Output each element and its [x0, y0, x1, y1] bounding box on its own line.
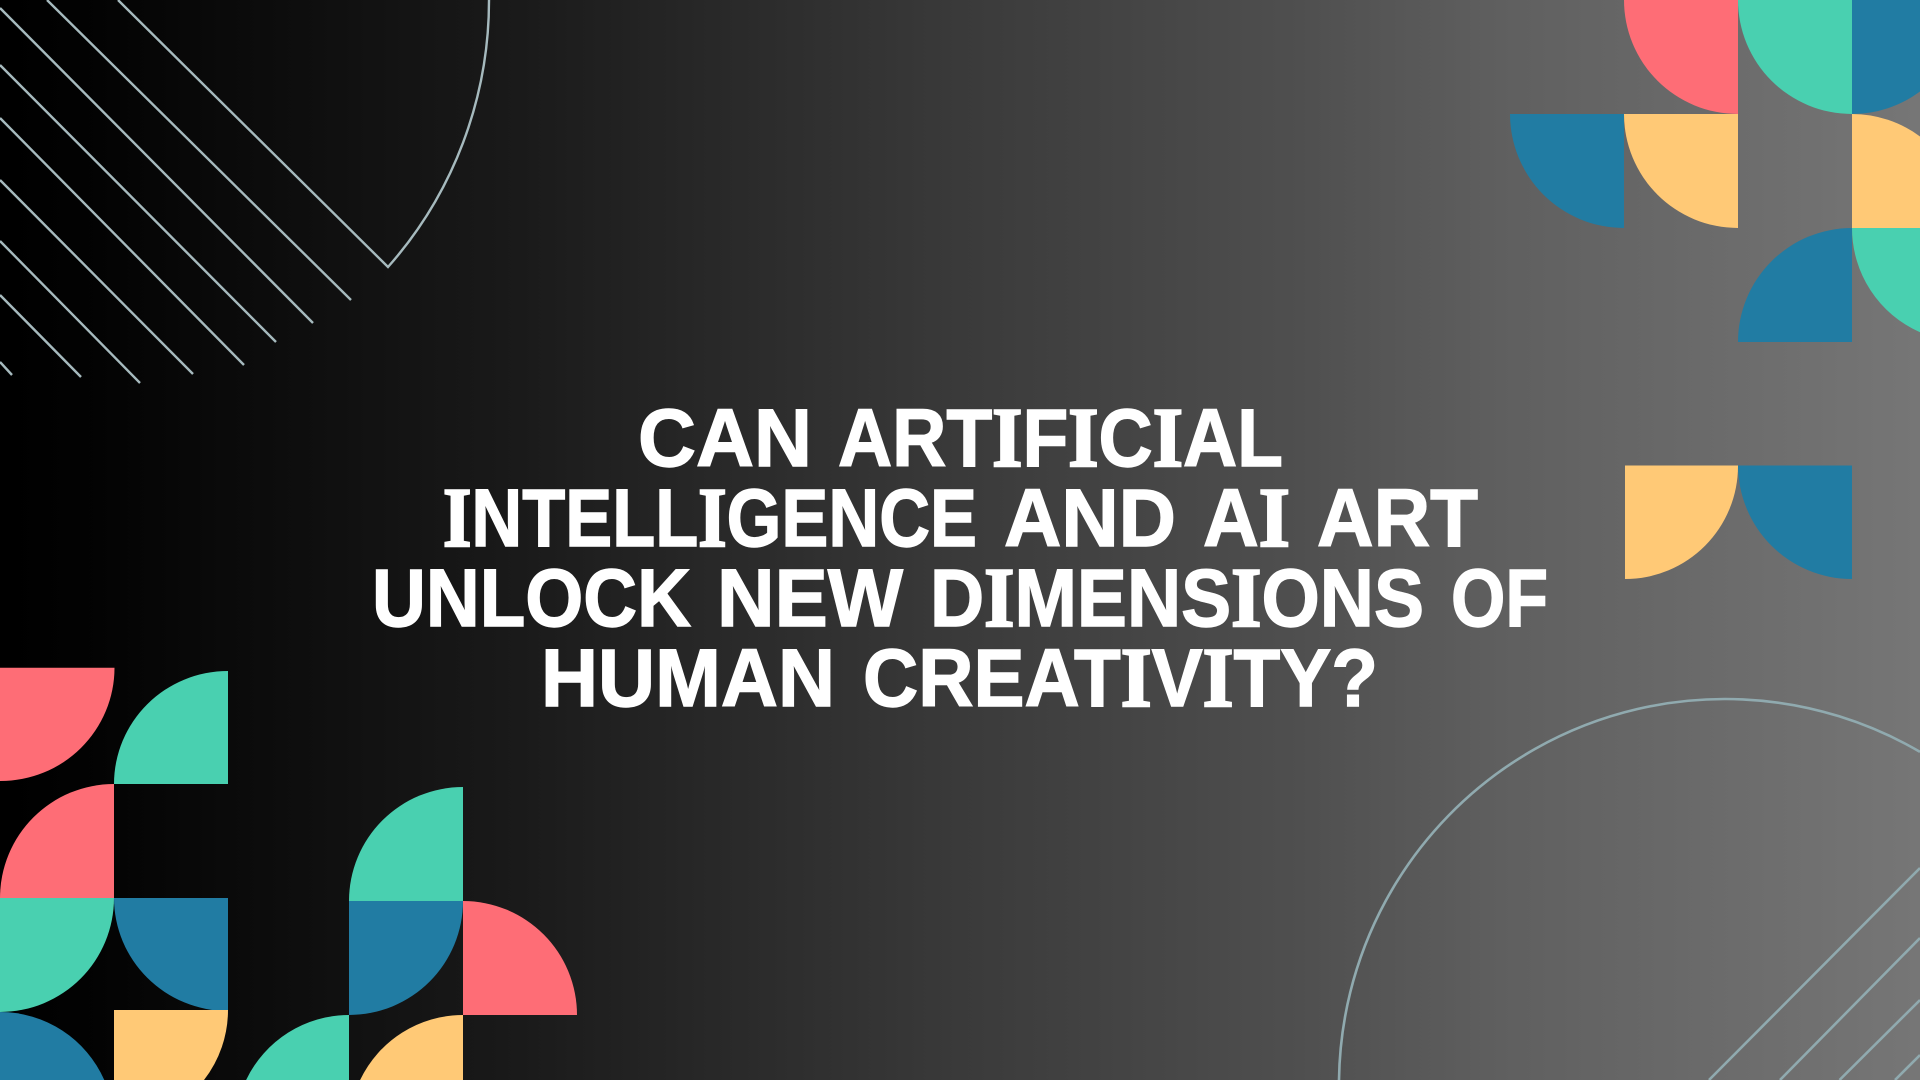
- title: AI: [1203, 471, 1290, 565]
- title: INTELLIGENCE: [443, 471, 977, 565]
- geometric shapes: bottom-center cluster: [246, 787, 577, 1080]
- geometric shapes: middle-right pair: [1625, 466, 1852, 579]
- title: ARTIFICIAL: [838, 391, 1283, 485]
- title: UNLOCK: [372, 553, 691, 644]
- line art: bottom-right circle and diagonal lines: [1339, 699, 1920, 1080]
- title: DIMENSIONS: [930, 551, 1424, 645]
- title: HUMAN: [541, 633, 835, 724]
- title: NEW: [717, 553, 904, 644]
- title: CREATIVITY?: [863, 631, 1378, 725]
- title: ART: [1317, 473, 1478, 564]
- geometric shapes: top-right cluster: [1510, 0, 1920, 342]
- title: [372, 391, 1548, 725]
- title: OF: [1451, 553, 1548, 644]
- title: CAN: [638, 393, 812, 484]
- line art: top-left arc and diagonal lines: [0, 0, 489, 383]
- geometric shapes: bottom-left column cluster: [0, 668, 228, 1080]
- title: AND: [1004, 473, 1176, 564]
